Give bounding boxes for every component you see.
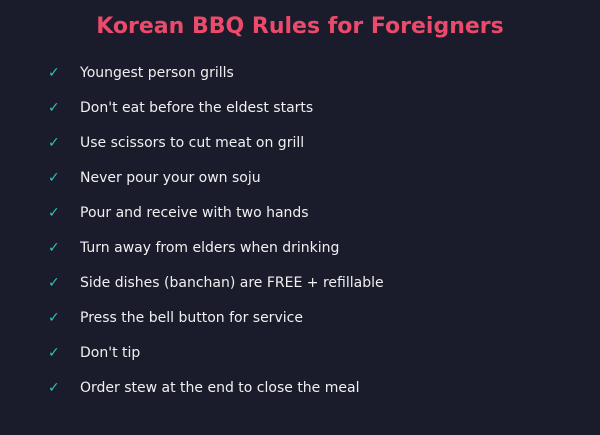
rule 7: ✓ bbox=[48, 275, 60, 291]
rule 1: ✓ bbox=[48, 65, 60, 81]
rule 4: ✓ bbox=[48, 170, 60, 186]
rule 4: Never pour your own soju bbox=[80, 170, 261, 186]
rule 9: ✓ bbox=[48, 345, 60, 361]
rule 1: Youngest person grills bbox=[80, 65, 234, 81]
rule 2: ✓ bbox=[48, 100, 60, 116]
rule 5: ✓ bbox=[48, 205, 60, 221]
rule 7: Side dishes (banchan) are FREE + refillable bbox=[80, 275, 384, 291]
rule 3: ✓ bbox=[48, 135, 60, 151]
rule 2: Don't eat before the eldest starts bbox=[80, 100, 313, 116]
rule 6: Turn away from elders when drinking bbox=[80, 240, 339, 256]
rules list bbox=[48, 65, 384, 396]
rule 9: Don't tip bbox=[80, 345, 140, 361]
rule 5: Pour and receive with two hands bbox=[80, 205, 309, 221]
rule 3: Use scissors to cut meat on grill bbox=[80, 135, 304, 151]
rule 9 bbox=[48, 345, 140, 361]
rule 10: Order stew at the end to close the meal bbox=[80, 380, 359, 396]
title: Korean BBQ Rules for Foreigners bbox=[96, 14, 504, 39]
rule 10: ✓ bbox=[48, 380, 60, 396]
rule 6: ✓ bbox=[48, 240, 60, 256]
rule 8: ✓ bbox=[48, 310, 60, 326]
rule 8: Press the bell button for service bbox=[80, 310, 303, 326]
